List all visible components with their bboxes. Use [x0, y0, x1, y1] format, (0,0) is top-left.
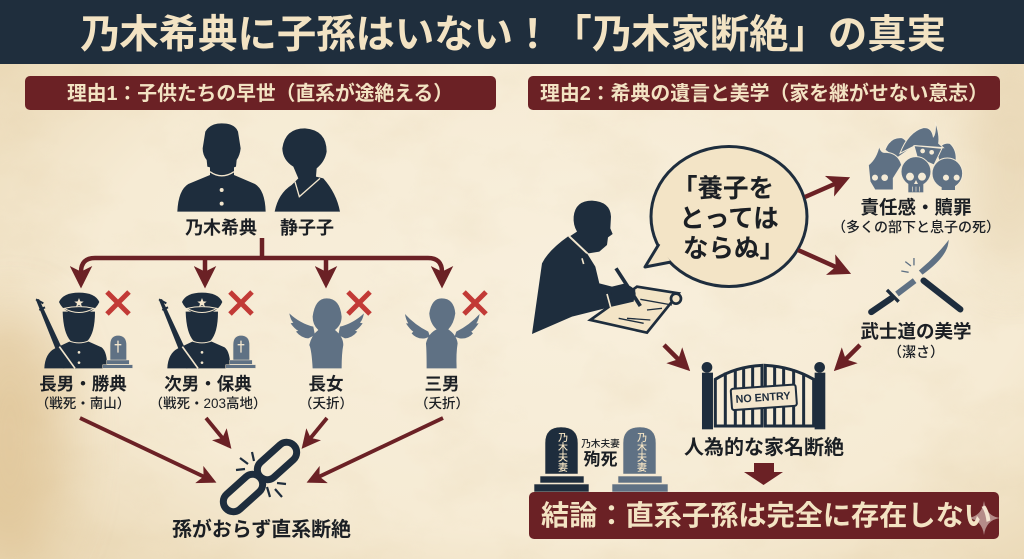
conclusion bar: 結論：直系子孫は完全に存在しない — [541, 500, 992, 531]
icon: right gravestone — [612, 427, 668, 492]
icon: left gravestone: 乃木夫妻 — [556, 432, 568, 473]
label: eldest daughter: 長女 — [308, 374, 344, 394]
label: third son: 三男 — [424, 374, 460, 394]
label: eldest son: 長男・勝典 — [39, 374, 127, 394]
label: artificial end of family name: 人為的な家名断絶 — [684, 436, 844, 459]
label: responsibility — [832, 197, 1000, 235]
panel heading: reason 2 — [528, 76, 1000, 110]
icon: X mark 1 — [107, 292, 129, 314]
label: third son: （夭折） — [415, 396, 469, 411]
arrow to responsibility — [805, 179, 846, 197]
icon: sparkle watermark — [968, 501, 1000, 535]
icon: second son soldier — [159, 293, 256, 368]
icon: third son angel — [405, 298, 480, 368]
icon: X mark 4 — [464, 292, 486, 314]
label: eldest daughter — [299, 374, 353, 411]
label: third son — [415, 374, 469, 411]
label: Shizuko: 静子子 — [280, 218, 334, 238]
speech bubble — [645, 146, 807, 286]
panel heading: reason 1 — [25, 76, 496, 110]
icon: left gravestone — [534, 427, 589, 492]
label: second son: 次男・保典 — [164, 374, 252, 394]
label: Nogi couple junshi: 殉死 — [584, 450, 618, 469]
label: bushido aesthetics: （潔さ） — [888, 344, 944, 360]
label: responsibility: 責任感・贖罪 — [860, 197, 972, 218]
label: second son — [149, 374, 267, 411]
speech bubble: 「養子を — [672, 175, 774, 203]
label: Nogi Maresuke: 乃木希典 — [185, 217, 257, 238]
icon: broken sword — [871, 243, 960, 312]
icon: closed gate with no entry sign — [702, 362, 825, 429]
arrows into broken chain — [80, 418, 443, 481]
conclusion bar — [529, 492, 999, 539]
label: bushido aesthetics — [860, 321, 972, 360]
label: second son: （戦死・203高地） — [149, 395, 267, 411]
icon: Shizuko silhouette — [275, 128, 340, 212]
label: responsibility: （多くの部下と息子の死） — [832, 219, 1000, 235]
icon: X mark 3 — [348, 292, 370, 314]
icon: right gravestone: 乃木夫妻 — [634, 432, 646, 473]
panel heading: reason 1: 理由1：子供たちの早世（直系が途絶える） — [67, 81, 453, 105]
label: eldest son — [36, 374, 130, 411]
arrow to gate from bushido — [837, 345, 860, 368]
title band: 乃木希典に子孫はいない！「乃木家断絶」の真実 — [80, 13, 946, 57]
label: eldest daughter: （夭折） — [299, 396, 353, 411]
label: eldest son: （戦死・南山） — [36, 396, 130, 411]
icon: eldest daughter angel — [289, 298, 364, 368]
icon: eldest son soldier — [36, 293, 133, 368]
arrow to gate from writer — [664, 345, 687, 368]
title band — [0, 0, 1024, 64]
arrow to bushido — [798, 250, 847, 272]
arrow down to conclusion — [744, 463, 783, 485]
family tree connector — [81, 238, 442, 284]
icon: broken chain — [219, 438, 301, 516]
panel heading: reason 2: 理由2：希典の遺言と美学（家を継がせない意志） — [540, 81, 988, 105]
label: Nogi couple junshi — [581, 437, 620, 469]
speech bubble: ならぬ」 — [683, 235, 785, 263]
icon: Nogi writing testament — [532, 201, 681, 334]
icon: X mark 2 — [230, 292, 252, 314]
icon: skulls and helmets — [868, 122, 963, 192]
label: no grandchildren: 孫がおらず直系断絶 — [172, 517, 351, 541]
icon: Nogi Maresuke silhouette — [177, 123, 266, 212]
label: Nogi couple junshi: 乃木夫妻 — [581, 437, 620, 450]
label: bushido aesthetics: 武士道の美学 — [860, 321, 972, 342]
speech bubble: とっては — [679, 205, 779, 233]
label: no entry sign: NO ENTRY — [735, 390, 792, 406]
